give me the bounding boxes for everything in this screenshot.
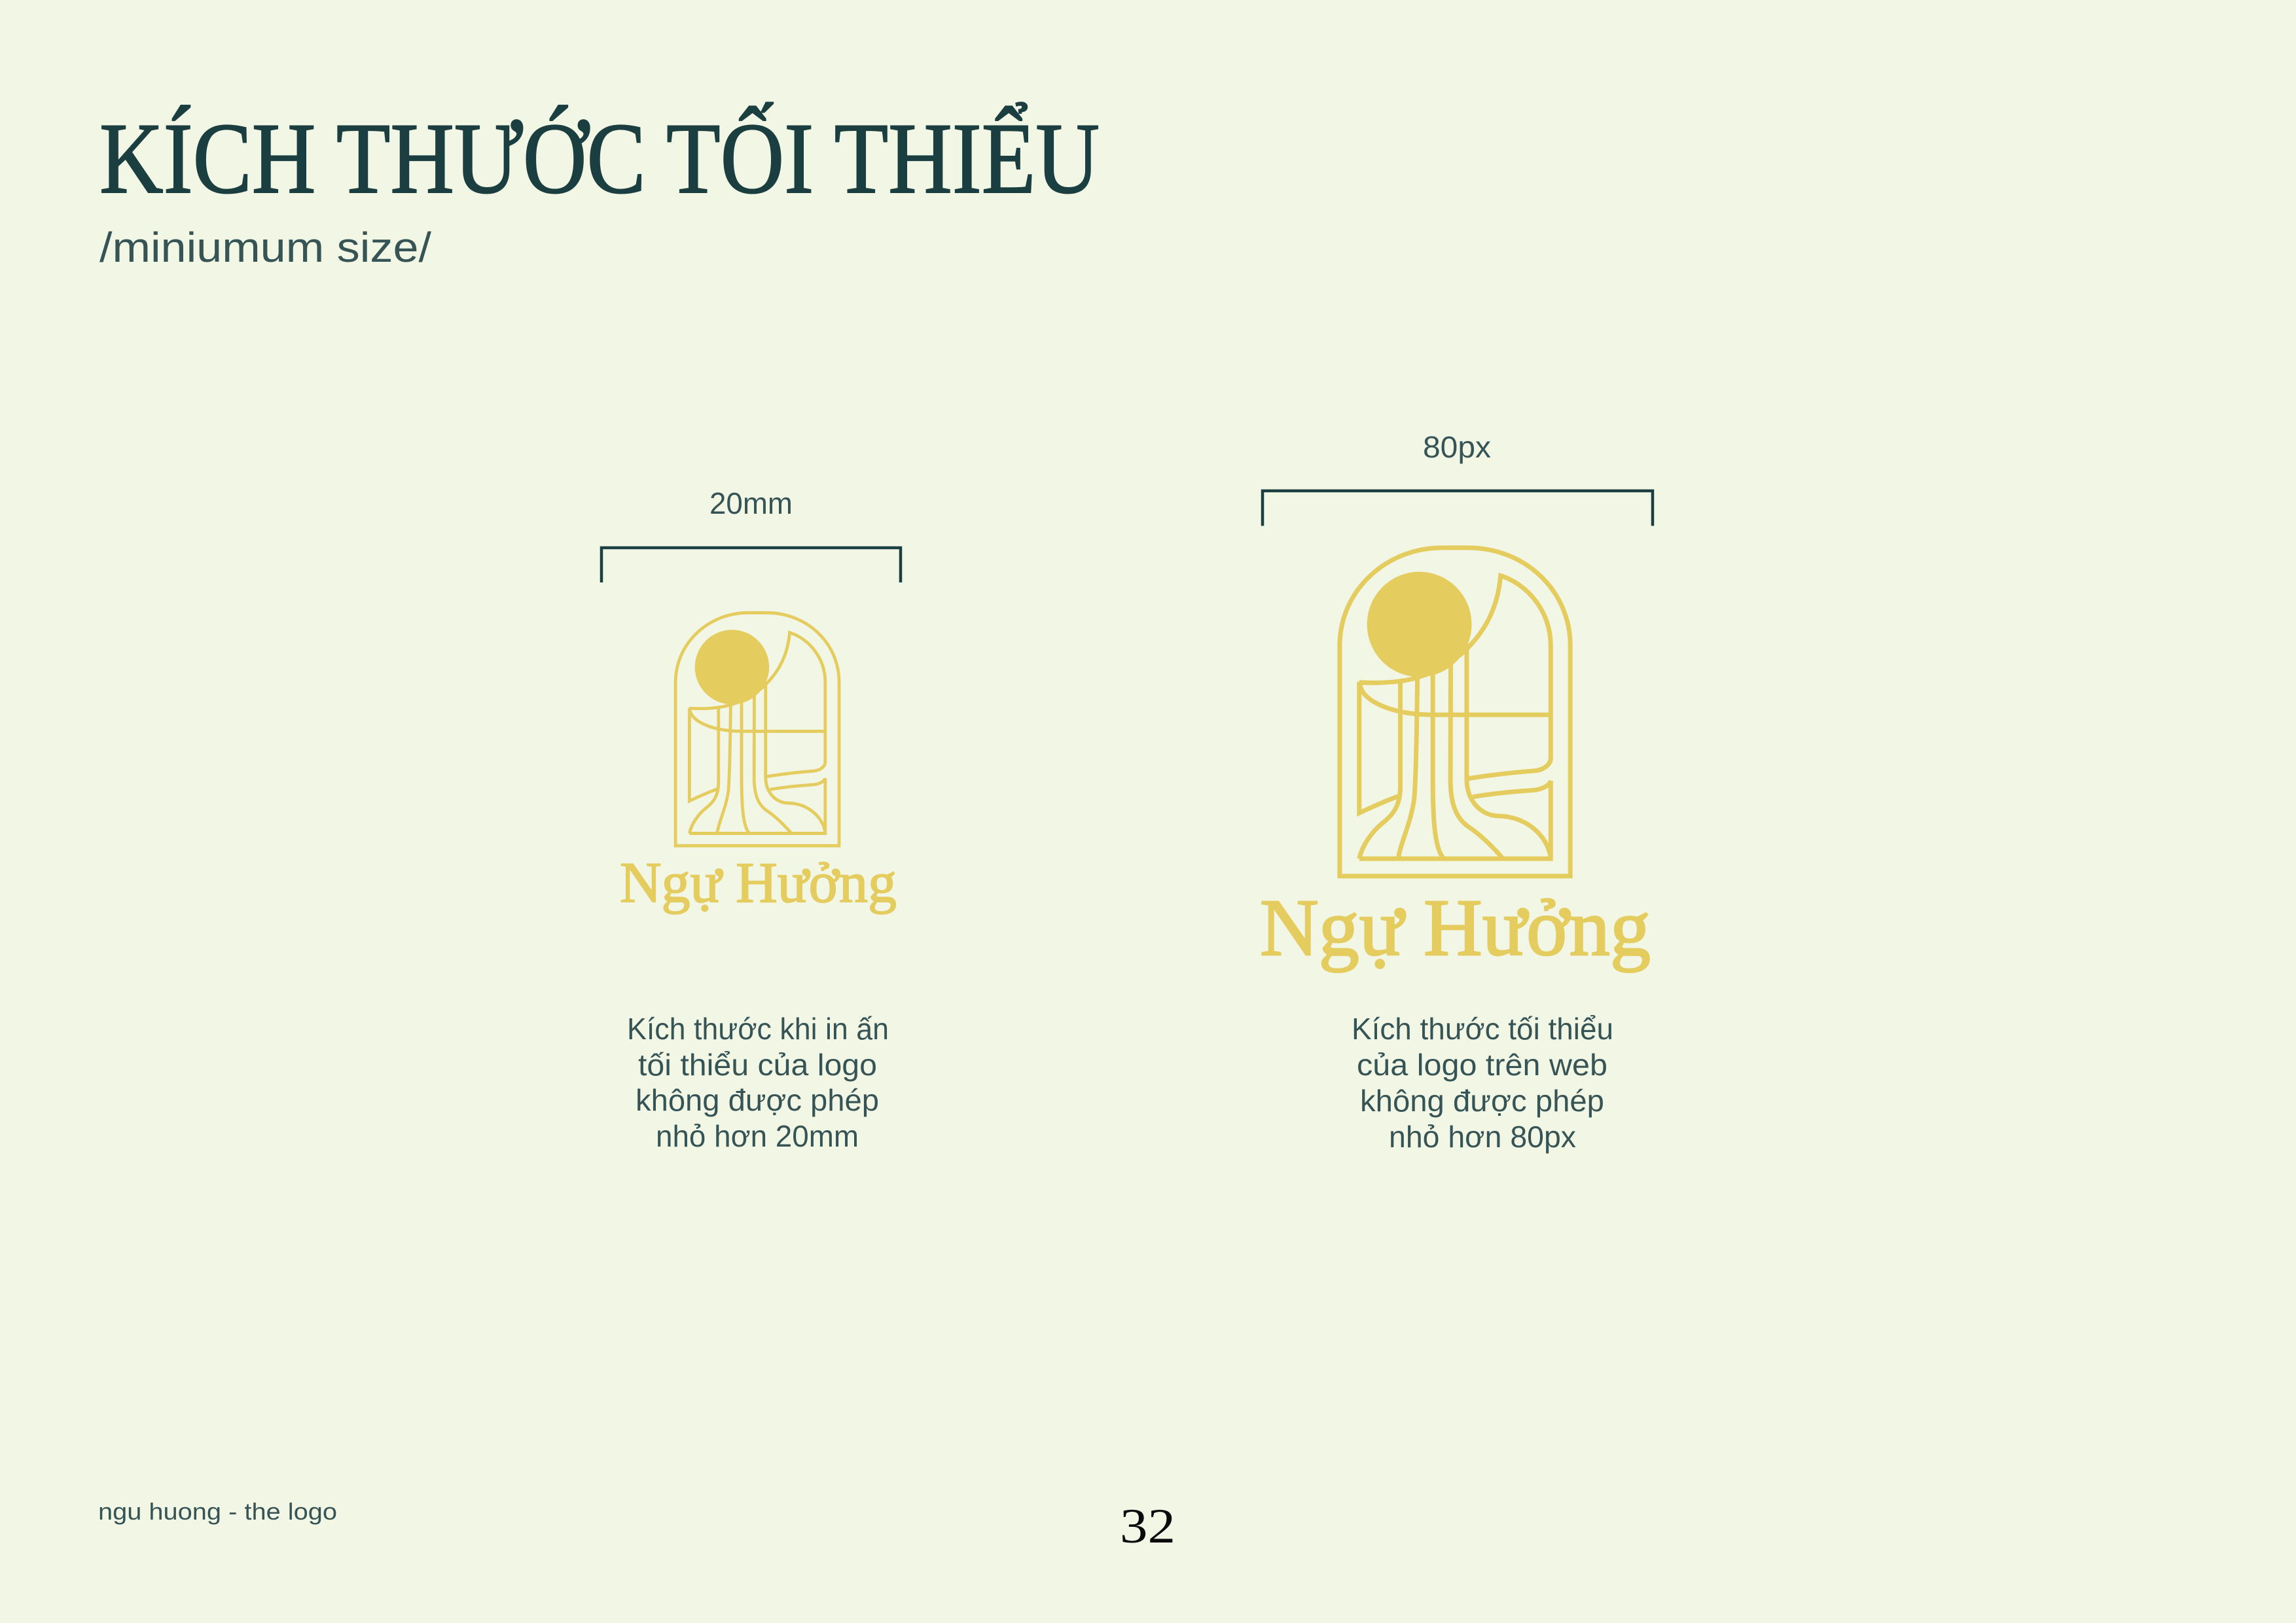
dimension label: 20mm: 20mm (709, 486, 793, 520)
text block: print note (627, 1012, 889, 1153)
text block: web note: của logo trên web (1357, 1048, 1607, 1082)
subtitle: /miniumum size/ (99, 224, 431, 271)
text block: print note: không được phép (636, 1083, 879, 1117)
text block: print note: tối thiểu của logo (638, 1048, 877, 1082)
dimension bracket: 20mm (601, 548, 901, 582)
icon: small logo mark (675, 613, 839, 846)
panel: print minimum size (601, 486, 901, 1153)
page number: 32 (1120, 1499, 1175, 1554)
text block: web note: Kích thước tối thiểu (1352, 1012, 1613, 1046)
text block: web note: nhỏ hơn 80px (1389, 1120, 1576, 1154)
text block: print note: Kích thước khi in ấn (627, 1012, 889, 1046)
text block: web note (1352, 1012, 1613, 1154)
text block: web note: không được phép (1360, 1084, 1604, 1118)
dimension label: 80px: 80px (1423, 430, 1491, 464)
icon: large logo mark (1340, 548, 1570, 876)
wordmark: large: Ngự Hưởng (1260, 883, 1651, 972)
wordmark: small: Ngự Hưởng (620, 851, 897, 915)
panel: web minimum size (1260, 430, 1653, 1154)
footer label: ngu huong - the logo (98, 1498, 337, 1525)
text block: print note: nhỏ hơn 20mm (656, 1119, 859, 1153)
title: KÍCH THƯỚC TỐI THIỂU (99, 102, 1100, 215)
dimension bracket: 80px (1263, 491, 1653, 526)
